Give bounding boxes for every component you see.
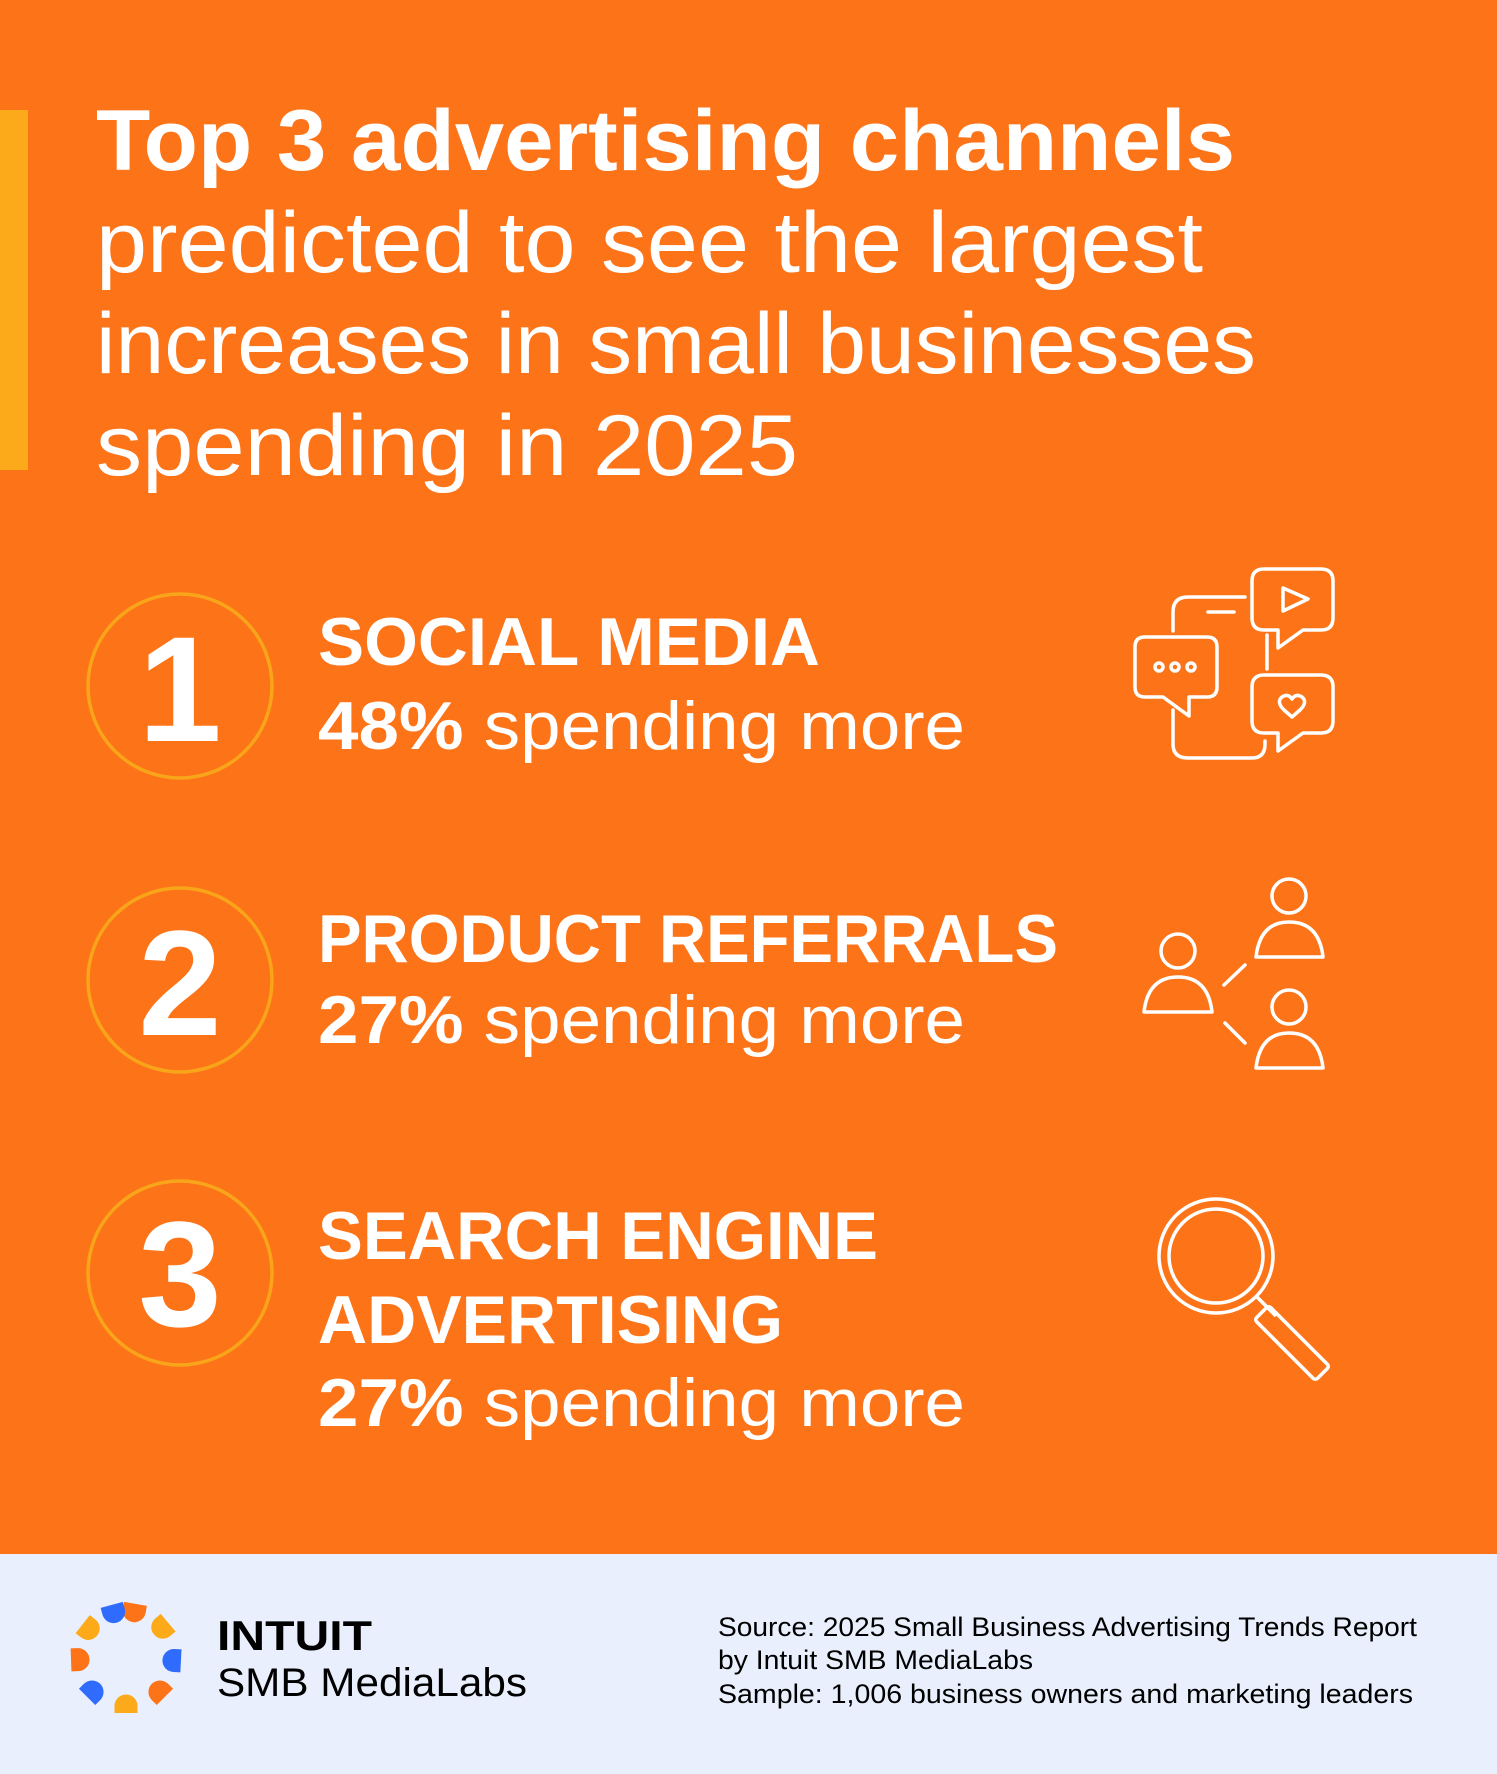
source note: Sample: 1,006 business owners and marketing leaders	[718, 1679, 1413, 1709]
heading: search engine advertising: ADVERTISING	[318, 1282, 783, 1358]
footer	[0, 1554, 1497, 1774]
stat: 27%: 27% spending more	[318, 1365, 965, 1441]
accent bar	[0, 110, 28, 470]
source note: Source: 2025 Small Business Advertising Trends Report	[718, 1612, 1418, 1642]
title: spending in 2025	[96, 398, 798, 494]
icon: magnifier	[1159, 1199, 1329, 1380]
source note	[718, 1612, 1418, 1709]
title	[96, 93, 1256, 494]
number badge 1	[88, 594, 272, 778]
logo text	[217, 1612, 527, 1705]
item 3: search engine advertising	[88, 1181, 1329, 1441]
title: Top 3 advertising channels	[96, 93, 1235, 189]
stat: 27%: 27% spending more	[318, 982, 965, 1058]
item 2: product referrals	[88, 879, 1323, 1072]
title: predicted to see the largest	[96, 195, 1203, 291]
number badge 3	[88, 1181, 272, 1365]
source note: by Intuit SMB MediaLabs	[718, 1645, 1033, 1675]
title: increases in small businesses	[96, 296, 1256, 392]
icon: social phone with bubbles	[1135, 569, 1333, 758]
logo mark	[71, 1602, 182, 1713]
number badge 2	[88, 888, 272, 1072]
icon: people referral	[1144, 879, 1323, 1068]
heading: social media: SOCIAL MEDIA	[318, 604, 820, 680]
heading: search engine advertising	[318, 1198, 878, 1358]
stat: 48%: 48% spending more	[318, 688, 965, 764]
item 1: social media	[88, 569, 1333, 778]
number badge 3: 3	[138, 1190, 222, 1358]
number badge 2: 2	[138, 899, 222, 1067]
logo text: INTUIT	[217, 1612, 372, 1659]
logo text: SMB MediaLabs	[217, 1661, 527, 1705]
number badge 1: 1	[138, 605, 222, 773]
heading: search engine advertising: SEARCH ENGINE	[318, 1198, 878, 1274]
heading: product referrals: PRODUCT REFERRALS	[318, 901, 1058, 977]
